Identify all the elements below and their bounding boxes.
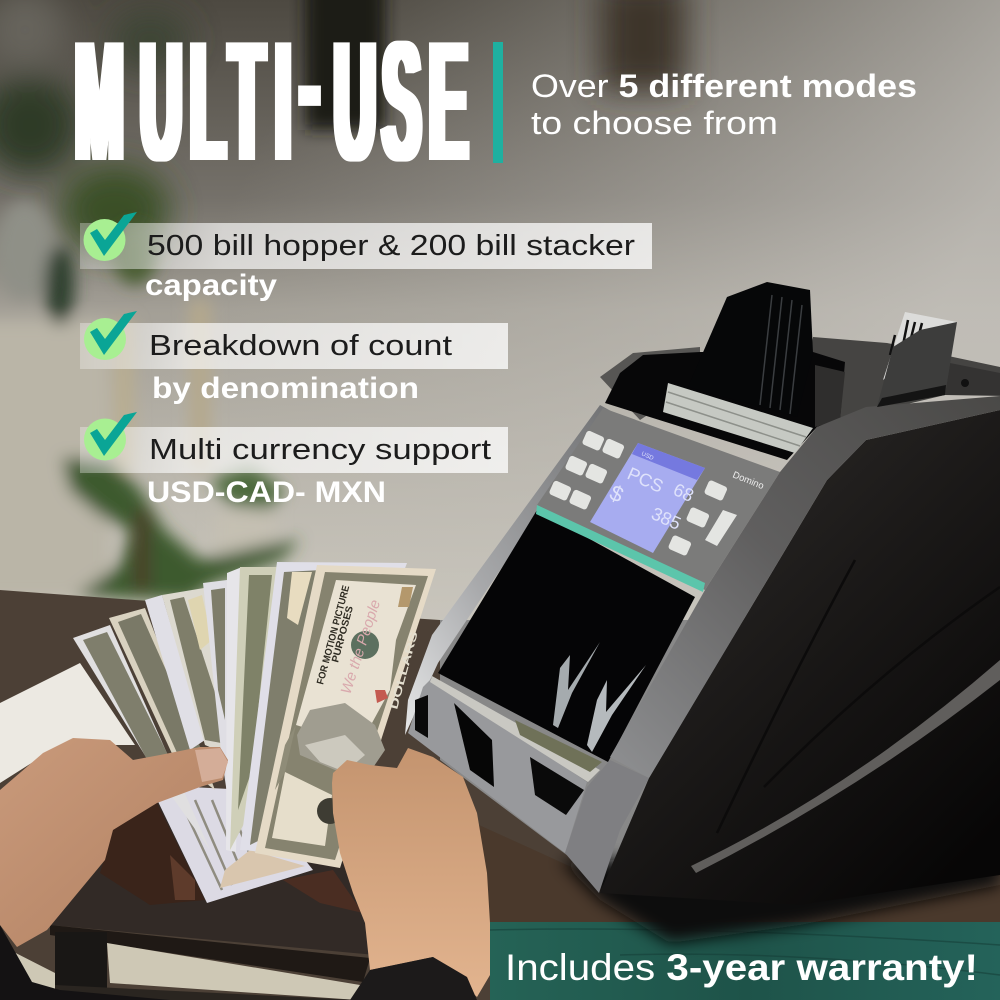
machine shadow <box>560 860 1000 943</box>
feature 2: by denomination <box>152 372 419 405</box>
control panel <box>537 408 780 590</box>
note 4 <box>162 588 240 760</box>
feature 3: USD-CAD- MXN <box>147 476 386 509</box>
stacker paddle right <box>877 322 957 407</box>
title divider <box>493 42 503 163</box>
top ten dollar bill: We the People <box>338 598 384 696</box>
palm shadow <box>100 803 205 905</box>
right hand <box>332 748 490 997</box>
teal strip <box>536 505 705 592</box>
silver base corner <box>565 760 649 893</box>
top ten dollar bill <box>255 565 436 868</box>
subtitle: Over 5 different modes <box>531 68 917 104</box>
hopper paddle left <box>688 282 813 417</box>
panel crease lines <box>717 560 1000 833</box>
subtitle: to choose from <box>531 105 778 141</box>
title: USE <box>334 6 468 197</box>
machine top left shell <box>600 347 700 420</box>
back top surface <box>800 337 1000 420</box>
silver tray <box>408 678 587 853</box>
table leg <box>55 932 107 988</box>
title: MULTI <box>75 6 291 197</box>
bill in tray <box>515 720 602 772</box>
finger under right hand <box>283 870 363 913</box>
note 7 <box>230 567 277 850</box>
feature 3: Multi currency support <box>149 434 491 466</box>
feed rollers <box>553 642 600 728</box>
black bill window <box>438 510 695 762</box>
note 1 <box>73 625 210 850</box>
feature 3 <box>80 412 508 509</box>
lcd screen <box>590 443 705 553</box>
overprint text: FOR MOTION PICTURE <box>315 584 352 686</box>
brand label: Domino <box>731 470 765 492</box>
note 8 <box>240 562 407 854</box>
banknote fan <box>73 562 436 903</box>
gray rim strip <box>610 396 1000 778</box>
feature 1: capacity <box>145 269 277 302</box>
money counter machine <box>405 282 1000 943</box>
portrait <box>297 703 385 772</box>
dark side panel <box>600 410 1000 905</box>
subtitle <box>531 68 917 141</box>
front beam of table <box>50 925 370 982</box>
tray openings <box>454 703 494 787</box>
wooden table with white paper <box>0 590 1000 1000</box>
dark table top near hands <box>0 790 430 960</box>
lcd readout: 385 <box>648 503 684 534</box>
lcd readout: 68 <box>670 479 697 506</box>
floor below table <box>0 945 55 1000</box>
tray slot <box>430 676 600 782</box>
lcd readout: PCS <box>624 463 666 497</box>
feature 1 <box>80 212 652 302</box>
right sleeve <box>350 957 477 1000</box>
seals <box>351 631 379 659</box>
silver left frame <box>405 405 618 735</box>
note 2 <box>109 608 215 790</box>
note 3 <box>145 595 205 750</box>
teal banner <box>490 922 1000 1000</box>
note 6 <box>226 567 242 852</box>
top ten dollar bill: DOLLARS <box>388 630 421 711</box>
hands <box>0 738 490 1000</box>
lcd readout: $ <box>606 480 627 508</box>
stacker grille right <box>883 312 957 380</box>
top ten dollar bill: PURPOSES <box>330 605 356 664</box>
bills in hopper <box>663 383 813 453</box>
warranty text: Includes 3-year warranty! <box>505 947 978 988</box>
lcd readout: USD <box>640 451 655 462</box>
feature 2: Breakdown of count <box>149 330 452 362</box>
title <box>75 0 468 197</box>
lcd readout <box>606 451 697 534</box>
feature 1: 500 bill hopper & 200 bill stacker <box>147 230 635 262</box>
black hopper cavity <box>605 352 845 460</box>
side highlight line <box>691 660 1000 873</box>
note 5 <box>203 580 228 800</box>
fan bottom stack <box>150 785 313 903</box>
left hand <box>0 738 228 947</box>
thumbnail <box>195 748 228 782</box>
feature 2 <box>80 311 508 405</box>
panel buttons <box>549 430 737 556</box>
background photo: wall and plant <box>0 0 1000 620</box>
